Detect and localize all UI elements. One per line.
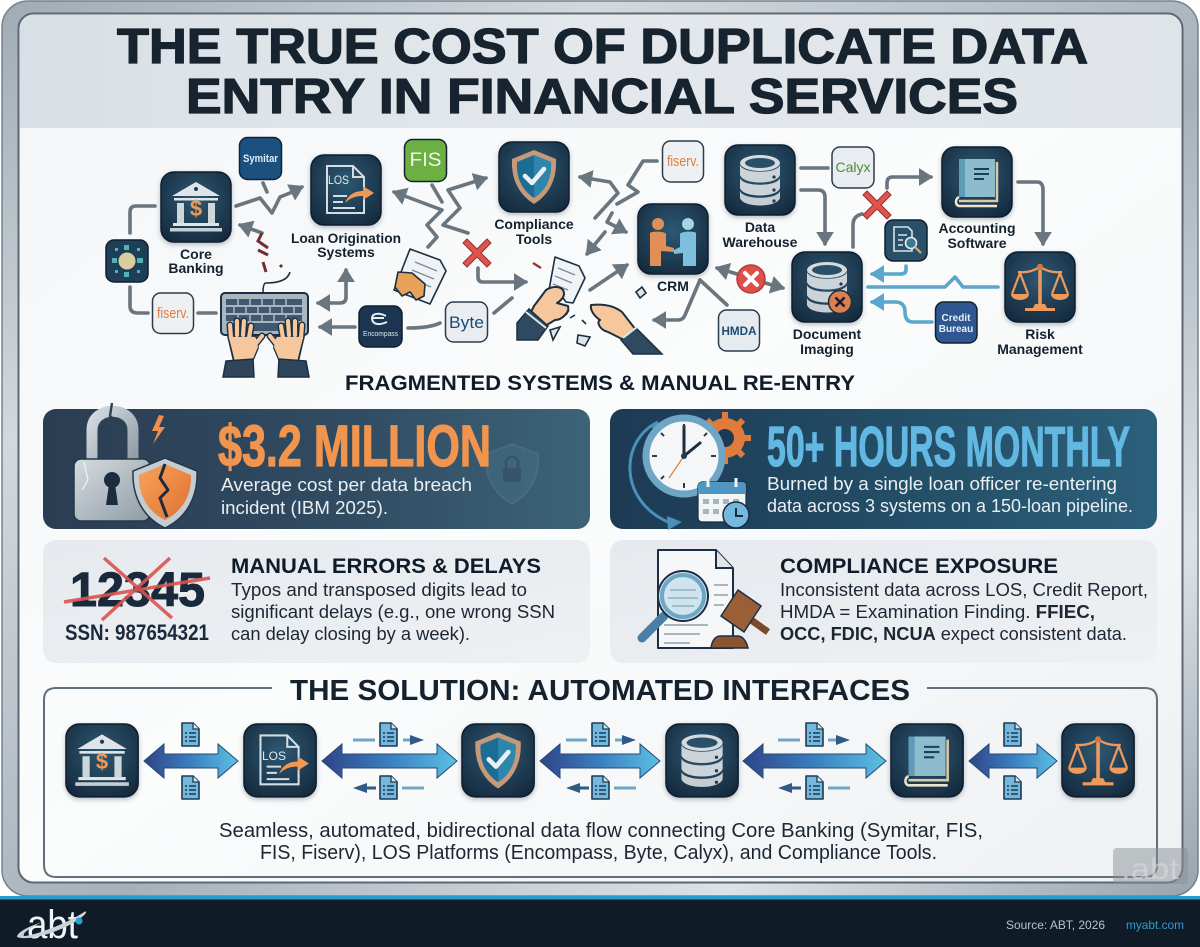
arrow: database to accounting [743,723,886,799]
icon: torn document with folder [394,249,446,304]
faint background shield [486,444,538,504]
icon: struck out digits and SSN [64,558,210,645]
body text: HMDA = Examination Finding. FFIEC, [780,602,1095,622]
label: Compliance Tools: Tools [516,231,552,247]
label: Document Imaging: Imaging [800,341,854,357]
chip: small gear hub [106,240,148,282]
label: Risk Management: Management [997,341,1083,357]
panel: compliance exposure [610,540,1157,663]
connector arrows grey [130,161,1043,328]
label: Compliance Tools: Compliance [494,216,574,232]
section heading: fragmented systems: FRAGMENTED SYSTEMS & MANUAL RE-ENTRY [345,372,855,395]
solution description: Seamless, automated, bidirectional data flow connecting Core Banking (Symitar, FIS, [219,820,983,842]
body text [780,580,1148,644]
chip: Calyx: Calyx [836,159,870,175]
label: Document Imaging [793,326,862,357]
label: Data Warehouse [723,219,798,250]
chip: document search [885,220,927,261]
stat description: Burned by a single loan officer re-entering [767,474,1117,494]
label: Loan Origination Systems: Systems [317,244,375,260]
heading: MANUAL ERRORS & DELAYS [231,555,541,578]
body text: Inconsistent data across LOS, Credit Report, [780,580,1148,600]
solution tile: LOS [244,724,316,797]
label: Loan Origination Systems [291,230,401,260]
chip: Credit Bureau [936,302,977,343]
stat description: data across 3 systems on a 150-loan pipeline. [767,496,1133,516]
chip: fiserv left [152,293,194,334]
label: Loan Origination Systems: Loan Origination [291,230,401,246]
icon: struck out digits and SSN: 12345 [70,564,205,617]
stat description [767,474,1133,516]
chip: Byte: Byte [449,313,484,332]
label: Accounting Software [938,220,1016,251]
title [117,20,1088,124]
chip: Encompass: Encompass [363,329,398,338]
Loan Origination Systems: LOS [328,173,349,187]
footer url: myabt.com [1126,918,1184,932]
solution tile: core banking [66,724,138,797]
label: Core Banking: Banking [168,260,224,276]
title: THE TRUE COST OF DUPLICATE DATA [117,20,1088,74]
label: Core Banking: Core [180,246,212,262]
chip: FIS: FIS [410,150,442,171]
body text: can delay closing by a week). [231,624,470,644]
Accounting Software [942,147,1012,217]
red X marks [463,191,891,267]
red circle X [737,265,765,293]
solution tile: accounting [891,724,963,797]
solution tile: risk [1062,724,1134,797]
label: Compliance Tools [494,216,574,247]
body text [231,580,555,644]
icon: struck out digits and SSN: SSN: 987654321 [65,620,209,645]
label: Core Banking [168,246,224,276]
footer logo: abt [27,903,78,947]
heading: THE SOLUTION: AUTOMATED INTERFACES [290,675,910,707]
heading: COMPLIANCE EXPOSURE [780,555,1058,578]
label: Risk Management [997,326,1083,357]
Compliance Tools [499,142,569,212]
body text: OCC, FDIC, NCUA expect consistent data. [780,624,1127,644]
stat description: Average cost per data breach [221,475,472,495]
label: Data Warehouse: Data [745,219,775,235]
Risk Management [1005,252,1075,322]
footer source: Source: ABT, 2026 [1006,918,1105,932]
chip: Byte [446,302,488,342]
panel: data breach stat [43,403,590,529]
title band [20,15,1181,128]
chip: Encompass [359,306,402,347]
arrow: compliance to database [540,723,660,799]
arrow: bank to LOS [144,723,238,799]
solution description [219,820,983,864]
chip: fiserv top [662,141,704,182]
chip: FIS [404,140,446,182]
title: ENTRY IN FINANCIAL SERVICES [186,70,1018,124]
solution tile: compliance [462,724,534,797]
icon: keyboard with typing hands [221,293,309,377]
Data Warehouse [725,145,795,215]
chip: fiserv left: fiserv. [157,305,189,322]
Core Banking [161,172,231,242]
Loan Origination Systems [311,155,381,225]
stat description: incident (IBM 2025). [221,498,388,518]
icon: magnifier document gavel [642,550,768,648]
watermark [1113,848,1188,886]
CRM [638,204,708,274]
label: Risk Management: Risk [1025,326,1055,342]
label: Document Imaging: Document [793,326,862,342]
solution tile: database [666,724,738,797]
stat description [221,475,472,518]
arrow: accounting to risk [969,723,1057,799]
chip: HMDA: HMDA [722,326,756,338]
label: Accounting Software: Accounting [938,220,1016,236]
body text: Typos and transposed digits lead to [231,580,527,600]
footer bar [0,896,1200,947]
panel: the solution [44,675,1157,877]
chip: Symitar [240,138,282,180]
chip: Credit Bureau: Credit [942,313,971,324]
Core Banking: $ [190,196,202,221]
fragmented systems diagram [106,138,1083,377]
body text: significant delays (e.g., one wrong SSN [231,602,555,622]
arrow: LOS to compliance [322,723,457,799]
chip: Symitar: Symitar [243,153,279,165]
icon: hands tearing document [517,257,662,354]
stat: 3.2 million: $3.2 MILLION [218,414,491,479]
panel: hours stat [610,409,1157,530]
chip: Credit Bureau: Bureau [939,324,973,335]
solution description: FIS, Fiserv), LOS Platforms (Encompass, Byte, Calyx), and Compliance Tools. [260,842,937,864]
icon: broken lock with shield [74,403,197,528]
watermark: .abt [1121,853,1180,886]
icon: clock gear calendar [630,412,751,530]
connector arrows blue [868,266,998,322]
label: Data Warehouse: Warehouse [723,234,798,250]
chip: fiserv top: fiserv. [667,153,699,170]
label: CRM: CRM [657,278,689,294]
Document Imaging [792,252,862,322]
label: Accounting Software: Software [947,235,1007,251]
solution tile: core banking: $ [96,749,108,774]
solution tile: LOS: LOS [262,749,286,763]
chip: Calyx [832,147,874,188]
panel: manual errors and delays [43,540,590,663]
chip: HMDA [718,310,760,351]
